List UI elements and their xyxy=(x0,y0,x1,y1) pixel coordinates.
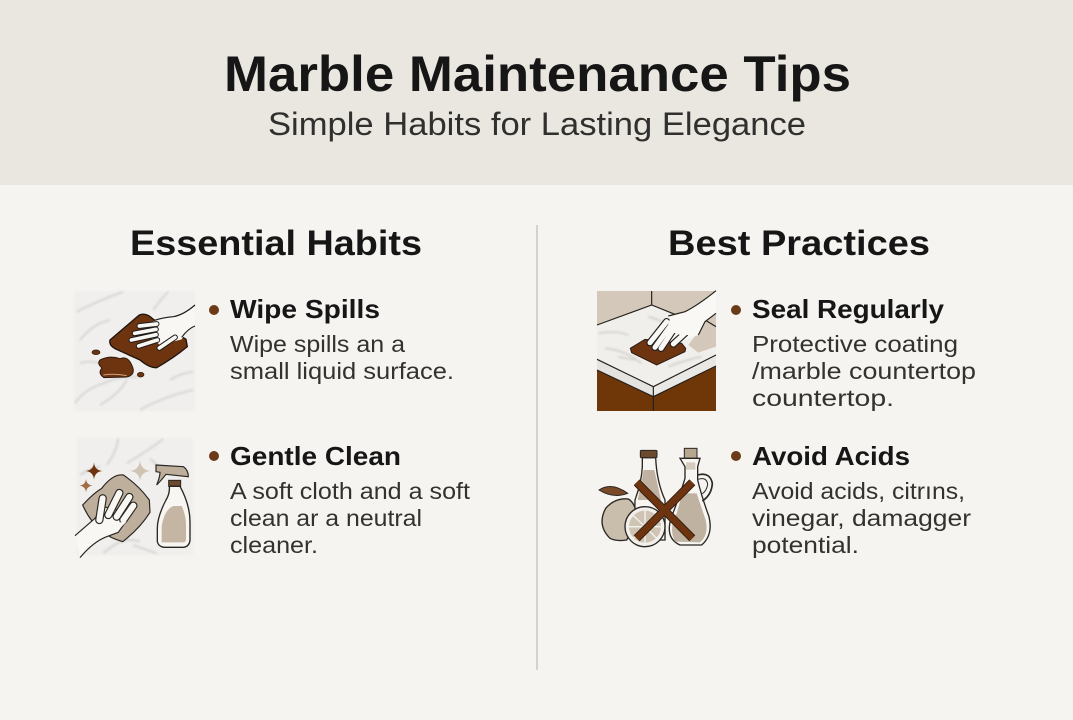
item: wipe spills: Wipe spills an a xyxy=(230,331,405,357)
heading: essential habits: Essential Habits xyxy=(130,224,422,263)
item: avoid acids: vinegar, damagger xyxy=(752,505,971,531)
item: seal regularly: Seal Regularly xyxy=(752,294,945,324)
subtitle: Simple Habits for Lasting Elegance xyxy=(268,106,806,142)
item: wipe spills: Wipe Spills xyxy=(230,294,380,324)
header band xyxy=(0,0,1073,185)
item: avoid acids: Avoid acids, citrıns, xyxy=(752,478,965,504)
title: Marble Maintenance Tips xyxy=(224,46,851,102)
icon: wiping a spill with a cloth xyxy=(74,291,195,411)
item: gentle clean xyxy=(209,441,471,558)
icon: gentle clean with cloth and spray bottle xyxy=(75,438,193,558)
item: wipe spills xyxy=(209,294,454,384)
item: avoid acids xyxy=(731,441,971,558)
item: seal regularly: /marble countertop xyxy=(752,358,976,384)
item: seal regularly xyxy=(731,294,976,411)
panel: essential habits xyxy=(74,224,471,558)
item: seal regularly: countertop. xyxy=(752,385,894,411)
item: gentle clean: cleaner. xyxy=(230,532,318,558)
item: wipe spills: small liquid surface. xyxy=(230,358,454,384)
panel: best practices xyxy=(597,224,976,558)
item: gentle clean: Gentle Clean xyxy=(230,441,401,471)
item: gentle clean: A soft cloth and a soft xyxy=(230,478,471,504)
heading: best practices: Best Practices xyxy=(668,224,930,263)
item: avoid acids: potential. xyxy=(752,532,859,558)
item: avoid acids: Avoid Acids xyxy=(752,441,910,471)
icon: sealing a marble countertop xyxy=(597,291,716,411)
item: seal regularly: Protective coating xyxy=(752,331,958,357)
item: gentle clean: clean ar a neutral xyxy=(230,505,422,531)
icon: avoid acids crossed out xyxy=(599,448,712,547)
